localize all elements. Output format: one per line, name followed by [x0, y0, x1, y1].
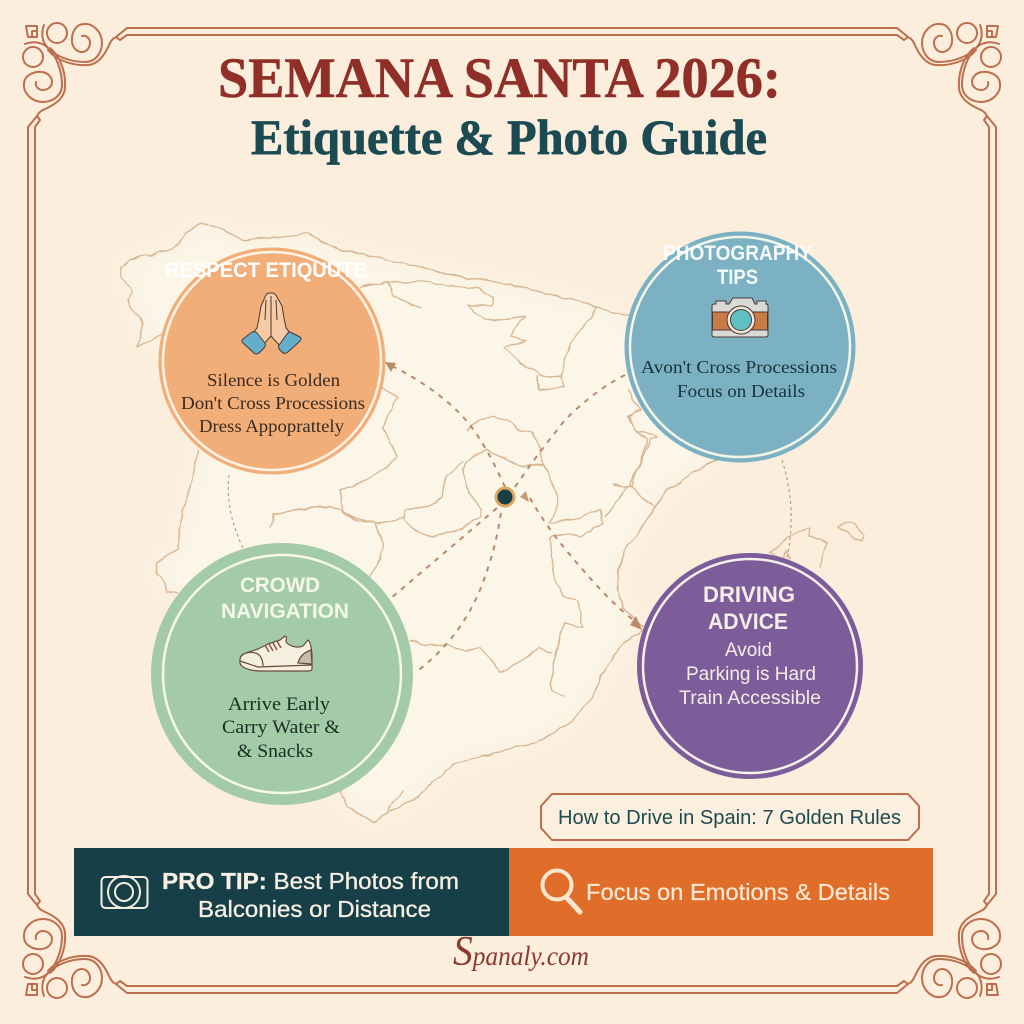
text: etiquette tips: Dress Appoprattely — [199, 416, 344, 436]
heading: photography tips — [663, 242, 812, 289]
panel: respect etiquette — [158, 248, 386, 474]
banner: pro tip — [74, 848, 509, 936]
icon: shoe — [240, 636, 312, 671]
icon: magnifier — [542, 870, 580, 912]
heading: crowd navigation — [221, 574, 349, 623]
link box: driving rules: How to Drive in Spain: 7 Golden Rules — [558, 807, 901, 829]
banner: focus — [509, 848, 933, 936]
panel: crowd navigation — [151, 543, 413, 805]
title: SEMANA SANTA 2026: — [218, 47, 781, 110]
heading: photography tips: TIPS — [717, 266, 758, 289]
centre marker — [494, 486, 516, 508]
icon: camera outline — [102, 876, 148, 908]
text: photography tips: Avon't Cross Processions — [641, 357, 837, 377]
brand: spanaly.com: Spanaly.com — [453, 929, 589, 975]
link box: driving rules — [541, 794, 919, 840]
text: driving tips: Parking is Hard — [686, 664, 816, 685]
text: photography tips: Focus on Details — [677, 381, 805, 401]
text: driving tips: Avoid — [725, 640, 772, 661]
heading: driving advice: DRIVING — [703, 582, 795, 607]
dashed connector to green panel, upper — [390, 508, 497, 599]
heading: crowd navigation: NAVIGATION — [221, 600, 349, 623]
dashed connector to purple panel — [520, 491, 642, 630]
heading: respect etiquette: RESPECT ETIQUUTE — [165, 259, 367, 282]
text: pro tip: Balconies or Distance — [198, 896, 431, 922]
text: etiquette tips: Don't Cross Processions — [181, 393, 365, 413]
heading: crowd navigation: CROWD — [240, 574, 320, 597]
text: crowd tips: Carry Water & — [222, 718, 341, 738]
dashed connector to orange panel — [385, 362, 505, 487]
dashed connector to green panel, lower — [415, 513, 501, 673]
text: photography tips — [641, 357, 837, 401]
text: crowd tips — [222, 695, 341, 762]
text: focus: Focus on Emotions & Details — [586, 879, 890, 905]
heading: driving advice: ADVICE — [708, 609, 788, 634]
map of Spain — [120, 223, 865, 822]
text: etiquette tips: Silence is Golden — [207, 370, 340, 390]
thin dashed arc, left — [228, 475, 243, 548]
panel: photography tips — [624, 232, 856, 462]
thin dashed arc, right — [782, 460, 791, 558]
text: crowd tips: Arrive Early — [228, 695, 331, 715]
title: Etiquette & Photo Guide — [251, 109, 767, 165]
heading: driving advice — [703, 582, 795, 634]
text: driving tips: Train Accessible — [679, 688, 821, 709]
text: driving tips — [679, 640, 821, 709]
text: pro tip — [162, 868, 459, 922]
title — [218, 47, 781, 165]
icon: praying hands — [242, 293, 301, 354]
text: etiquette tips — [181, 370, 365, 436]
text: crowd tips: & Snacks — [237, 742, 313, 762]
dashed connector to blue panel — [515, 375, 625, 487]
heading: photography tips: PHOTOGRAPHY — [663, 242, 812, 265]
text: pro tip: PRO TIP: Best Photos from — [162, 868, 459, 894]
icon: camera — [712, 298, 768, 337]
panel: driving advice — [637, 553, 863, 779]
